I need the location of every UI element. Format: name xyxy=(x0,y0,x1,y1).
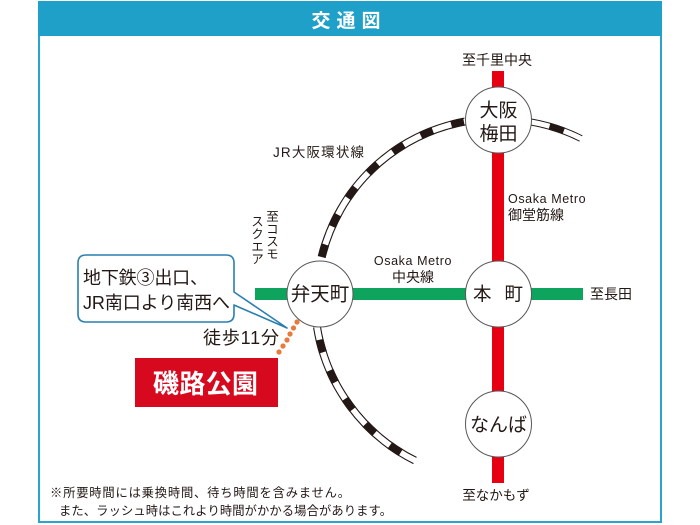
chart: JR Osaka Loop Line upper-right arc xyxy=(531,122,583,140)
station: Bentencho: 弁天町 xyxy=(291,284,349,306)
label: 11 minute walk: 徒歩11分 xyxy=(203,328,279,348)
label: to Cosmosquare: 至コスモ xyxy=(264,210,278,260)
label: Midosuji Line: Osaka Metro xyxy=(508,192,586,206)
footnote: また、ラッシュ時はこれより時間がかかる場合があります。 xyxy=(59,503,392,518)
chart: JR Osaka Loop Line lower arc xyxy=(317,327,416,461)
callout: directions from station exit: JR南口より南西へ xyxy=(83,293,230,313)
label: Chuo Line: 中央線 xyxy=(392,269,434,285)
callout: directions from station exit: 地下鉄③出口、 xyxy=(83,268,208,288)
station: Hommachi xyxy=(466,261,532,327)
label: Chuo Line: Osaka Metro xyxy=(374,254,452,268)
station: Hommachi: 本 町 xyxy=(473,284,523,304)
station: Bentencho xyxy=(287,261,353,327)
destination box: Isoji Park: 磯路公園 xyxy=(153,369,258,399)
footnote xyxy=(50,486,392,518)
label: JR Osaka Loop Line: JR大阪環状線 xyxy=(273,145,364,160)
label: to Senri-Chuo: 至千里中央 xyxy=(462,52,532,68)
station: Namba xyxy=(466,391,532,457)
chart: Chuo Line green bar xyxy=(255,288,583,300)
destination box: Isoji Park xyxy=(135,358,278,407)
callout: directions from station exit xyxy=(78,255,287,328)
station: Osaka Umeda: 梅田 xyxy=(479,123,518,145)
footnote: ※所要時間には乗換時間、待ち時間を含みません。 xyxy=(50,486,350,500)
title: 交通図 xyxy=(311,10,387,32)
label: Midosuji Line xyxy=(508,192,586,223)
station: Osaka Umeda xyxy=(466,87,532,153)
label: to Cosmosquare: スクエア xyxy=(249,215,263,265)
header bar xyxy=(38,1,662,36)
label: Midosuji Line: 御堂筋線 xyxy=(508,207,564,223)
label: to Nakamozu: 至なかもず xyxy=(462,488,530,503)
chart: Midosuji Line red bar xyxy=(492,71,504,483)
chart: JR Osaka Loop Line upper-left arc xyxy=(322,121,466,257)
label: to Nagata: 至長田 xyxy=(590,286,632,302)
label: Chuo Line xyxy=(374,254,452,285)
station: Osaka Umeda: 大阪 xyxy=(479,100,518,122)
walking route dots xyxy=(276,319,300,355)
label: to Cosmosquare xyxy=(249,210,278,265)
station: Namba: なんば xyxy=(470,414,527,436)
